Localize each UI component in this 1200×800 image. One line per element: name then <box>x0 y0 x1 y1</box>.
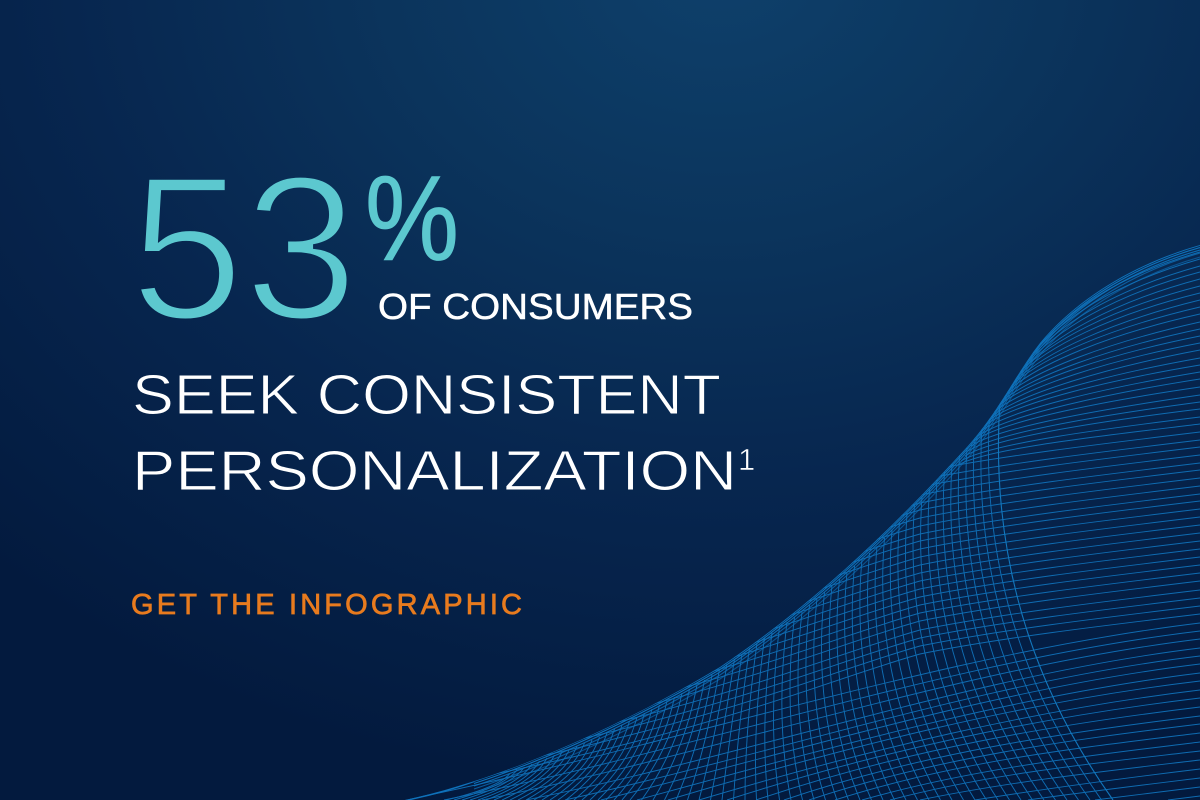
footnote marker: 1 <box>738 442 755 477</box>
wireframe mesh wave <box>400 245 1200 800</box>
dense edge band <box>474 245 1200 793</box>
mesh rows: lower sweep <box>405 623 1200 800</box>
headline line 2: PERSONALIZATION <box>132 439 737 503</box>
mesh rows: middle sweep <box>492 432 1200 775</box>
mesh rows: upper arcs <box>958 252 1200 465</box>
mesh columns <box>446 414 1102 800</box>
text: of consumers: OF CONSUMERS <box>378 286 693 327</box>
percent sign: % <box>365 150 459 286</box>
edge band tip <box>405 781 474 800</box>
call to action: GET THE INFOGRAPHIC <box>131 589 522 621</box>
headline line 1: SEEK CONSISTENT <box>132 363 721 427</box>
statistic: 53: 53 <box>130 133 358 363</box>
mesh boundary column <box>998 400 1113 800</box>
